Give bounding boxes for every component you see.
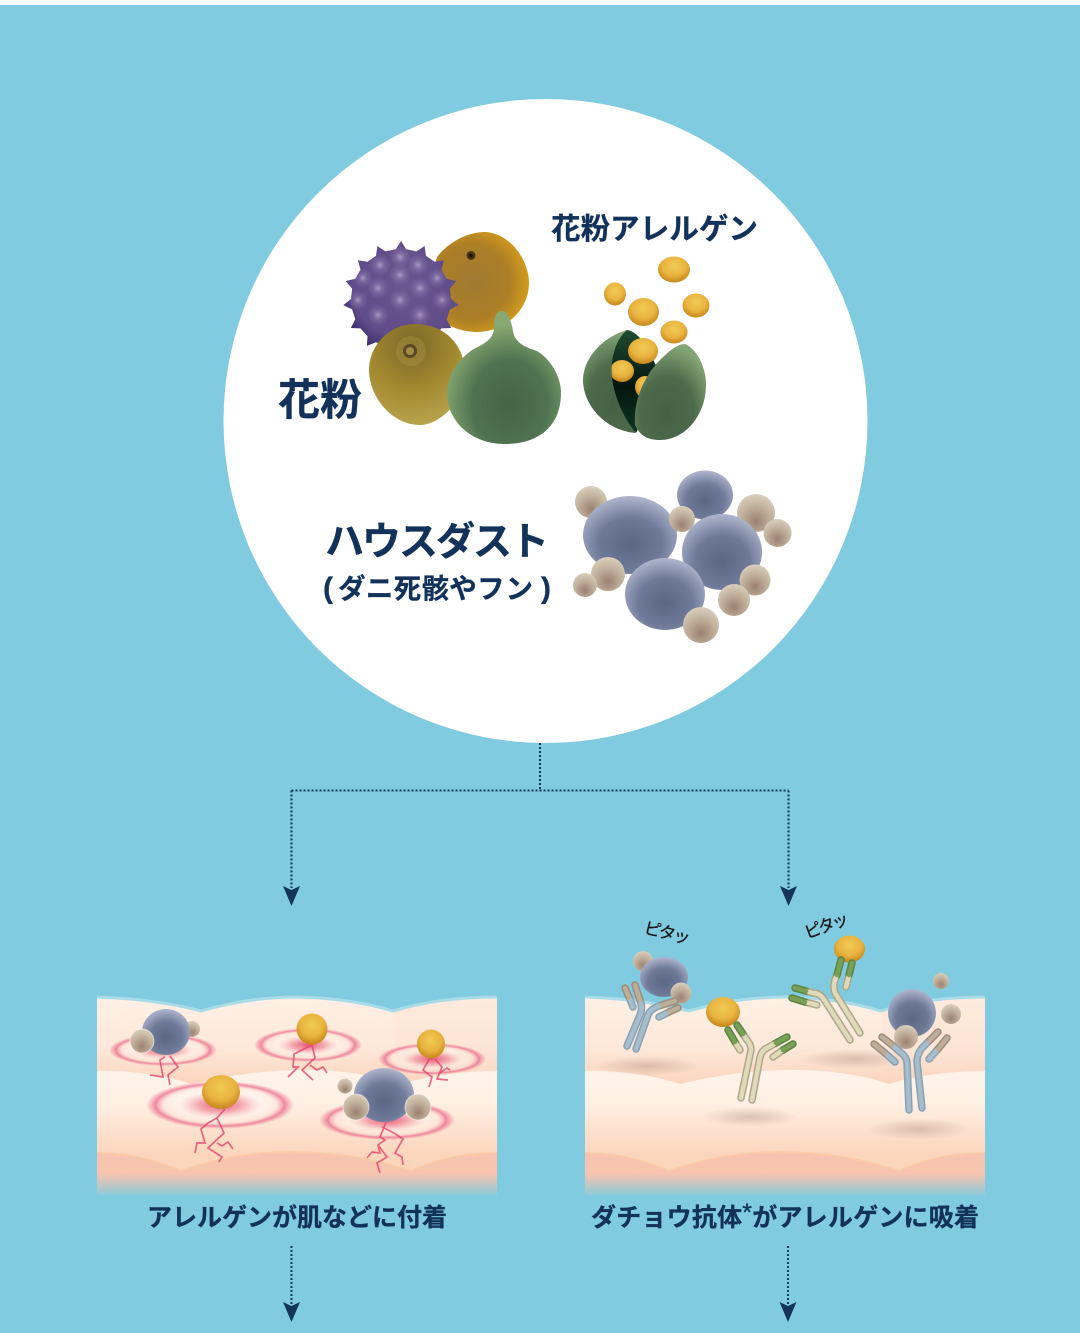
house dust allergen caught at left: [633, 951, 692, 1004]
antibody: cream rotated: [792, 960, 860, 1040]
icon: olive pollen: [369, 324, 465, 425]
tan particle on right antibody: [894, 1025, 918, 1049]
label: ダニ死骸やフン: ダニ死骸やフン: [338, 573, 533, 604]
antibody shadows: [595, 1049, 970, 1140]
icon: green pollen: [447, 311, 561, 444]
arrow: dotted branch from circle to both panels: [283, 743, 797, 906]
label: ピタッ right: ピタッ: [802, 909, 852, 943]
caption: left: アレルゲンが肌などに付着: [147, 1203, 447, 1232]
label: ピタッ left: ピタッ: [642, 918, 692, 948]
orange allergen caught at top right: [834, 936, 865, 962]
orange allergen caught at centre: [706, 997, 740, 1027]
right parenthesis: ): [541, 572, 551, 605]
arrow: lower left: [283, 1246, 300, 1322]
panel: antibodies adsorbing allergens on skin: [585, 909, 985, 1198]
arrow: lower right: [780, 1246, 796, 1322]
label: ハウスダスト: [323, 521, 551, 605]
icon: split pollen releasing allergens: [583, 256, 710, 440]
allergen particles: [130, 1009, 445, 1122]
white circle panel: [224, 99, 868, 743]
antibody: cream centre: [728, 1025, 793, 1100]
label: 花粉: 花粉: [278, 377, 362, 425]
label: ハウスダスト: ハウスダスト: [325, 521, 549, 564]
caption: right: *: [742, 1199, 752, 1227]
irritation rings: [109, 1028, 486, 1140]
house dust allergen caught at right: [888, 973, 961, 1037]
antibody: blue left: [625, 985, 678, 1049]
antibody: blue right: [874, 1032, 947, 1110]
skin cracks: [150, 1045, 450, 1173]
panel: allergens on skin: [97, 997, 497, 1198]
label: 花粉アレルゲン: 花粉アレルゲン: [551, 213, 758, 246]
caption: right: ダチョウ抗体: [591, 1204, 742, 1232]
icon: purple spiky pollen: [343, 241, 459, 356]
icon: orange pollen: [430, 232, 529, 332]
left parenthesis: (: [323, 572, 333, 605]
icon: house dust cluster: [573, 470, 792, 643]
caption: right: がアレルゲンに吸着: [752, 1203, 979, 1232]
